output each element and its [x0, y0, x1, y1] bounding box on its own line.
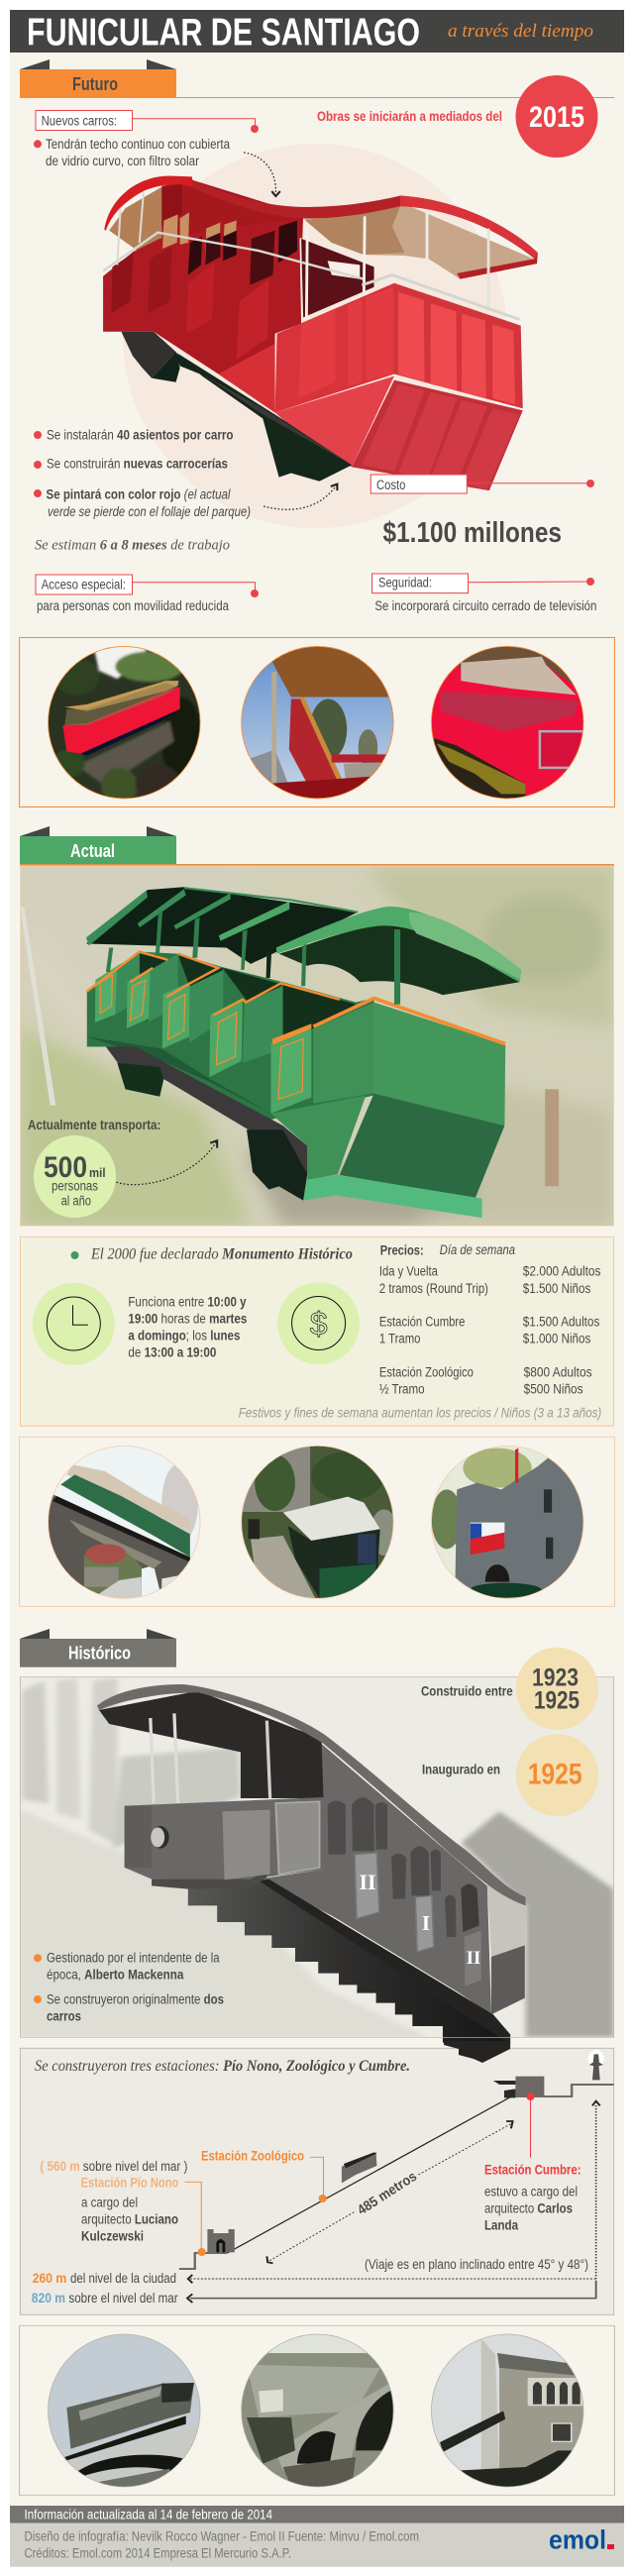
callout: construido entre: Construido entre [421, 1684, 513, 1699]
text: opening hours: a domingo; los lunes [128, 1329, 240, 1343]
section ribbon: Actual [20, 826, 614, 866]
callout: 500 mil personas: Actualmente transporta: [28, 1118, 160, 1132]
callout: 500 mil personas: personas [52, 1178, 98, 1193]
panel: historic carriage over faded photo [20, 1676, 614, 2064]
prices table: 2 tramos (Round Trip) [379, 1281, 488, 1296]
callout: seguridad: Se incorporará circuito cerrado de televisión [374, 598, 596, 613]
height: mar [32, 2291, 178, 2306]
callout: construido entre: 1925 [534, 1687, 580, 1715]
photo: old carriage on bridge [49, 2334, 200, 2487]
panel: schedule and prices [20, 1236, 614, 1426]
photo frame [242, 646, 393, 799]
bullet list: histórico [34, 1951, 224, 2024]
text: opening hours: de 13:00 a 19:00 [128, 1345, 216, 1360]
callout: construido entre: 1923 [532, 1664, 579, 1692]
photo: red carriage interior [432, 646, 583, 799]
bullet list: histórico: Se construyeron originalmente dos [47, 1992, 224, 2007]
station: Zoológico: Estación Zoológico [201, 2149, 304, 2164]
callout: nuevos carros: Tendrán techo continuo con cubierta [46, 137, 230, 152]
callout: seguridad: Seguridad: [378, 576, 432, 590]
panel: historic photos [20, 2325, 614, 2495]
callout: obras 2015: Obras se iniciarán a mediados del [317, 109, 502, 124]
station: Pío Nono [40, 2159, 187, 2244]
callout: nuevos carros: de vidrio curvo, con filtro solar [46, 154, 199, 168]
arrow: color pointer [264, 484, 337, 509]
icon: dollar: $ [310, 1306, 328, 1342]
callout: nuevos carros [34, 111, 259, 168]
callout: nuevos carros: Nuevos carros: [42, 113, 117, 129]
prices table: Estación Zoológico [379, 1365, 474, 1380]
prices table: $1.500 Adultos [523, 1315, 600, 1330]
carriage class labels: I [422, 1911, 430, 1935]
station: Pío Nono: Kulczewski [81, 2229, 144, 2244]
photo: red carriage in the forest [49, 644, 202, 805]
prices table: Estación Cumbre [379, 1315, 465, 1330]
callout: costo: Costo [376, 478, 405, 492]
note: inclination: (Viaje es en plano inclinado entre 45° y 48°) [365, 2257, 588, 2272]
footer: update bar: Información actualizada al 14 de febrero de 2014 [24, 2507, 272, 2522]
text: opening hours [128, 1294, 247, 1360]
callout: seguridad [372, 574, 596, 613]
photo: carriage at station [242, 1446, 398, 1598]
subtitle: a través del tiempo [448, 21, 593, 42]
callout: 500 mil personas [28, 1118, 160, 1218]
prices table: $1.500 Niños [523, 1281, 591, 1296]
station: Cumbre: Landa [484, 2218, 518, 2233]
photo: stone castle station [432, 1446, 583, 1598]
prices table: $2.000 Adultos [523, 1264, 601, 1279]
station: Pío Nono: Estación Pío Nono [81, 2176, 178, 2191]
bullet list: futuro [34, 428, 251, 519]
panel: actual carriage over faded photo [20, 866, 614, 1226]
callout: inaugurado en: Inaugurado en [422, 1763, 500, 1777]
footer: credits: Créditos: Emol.com 2014 Empresa El Mercurio S.A.P. [24, 2546, 291, 2561]
prices table: Día de semana [440, 1242, 515, 1257]
station: Pío Nono: a cargo del [81, 2196, 138, 2210]
prices table: $500 Niños [524, 1382, 583, 1397]
illustration: red future carriage [103, 176, 538, 490]
station: Cumbre: arquitecto Carlos [484, 2201, 573, 2216]
photo frame [49, 2334, 200, 2487]
callout: acceso especial: Acceso especial: [42, 578, 126, 592]
prices table: $800 Adultos [524, 1365, 592, 1380]
text: opening hours: Funciona entre 10:00 y [128, 1294, 247, 1309]
photo: old upper station [432, 2334, 583, 2487]
header bar [10, 10, 624, 54]
section ribbon: Futuro: Futuro [72, 74, 118, 94]
illustration: gray carriage [97, 1684, 526, 2064]
section ribbon: Histórico [20, 1629, 176, 1667]
height: ciudad: 260 m [33, 2271, 66, 2286]
section ribbon: Actual: Actual [70, 841, 115, 861]
station: Cumbre: estuvo a cargo del [484, 2185, 578, 2200]
arrow: transport pointer [117, 1140, 217, 1185]
photo frame [242, 1446, 393, 1598]
callout: obras 2015 [317, 75, 598, 158]
text: opening hours: 19:00 horas de martes [128, 1312, 247, 1327]
carriage class labels: II [467, 1948, 480, 1969]
title: FUNICULAR DE SANTIAGO [27, 12, 420, 54]
monument note: El 2000 fue declarado Monumento Histórico [90, 1246, 353, 1263]
pale background circle [123, 144, 507, 528]
callout: construido entre [421, 1648, 598, 1730]
bullet list: histórico: época, Alberto Mackenna [47, 1968, 184, 1983]
photo frame [432, 1446, 583, 1598]
photo frame [242, 2334, 393, 2487]
prices table [379, 1242, 601, 1397]
bullet list: futuro: Se pintará con color rojo (el actual [46, 487, 231, 502]
icon: dollar [277, 1282, 360, 1364]
station: Cumbre: Estación Cumbre: [484, 2163, 581, 2178]
callout: inaugurado en [422, 1734, 598, 1816]
station: Cumbre [484, 2163, 581, 2233]
heading: Se construyeron tres estaciones: Pío Nono, Zoológico y Cumbre. [35, 2058, 410, 2075]
background photo [20, 867, 614, 1226]
station: Pío Nono: ( 560 m sobre nivel del mar ) [40, 2159, 187, 2174]
bullet list: histórico: Gestionado por el intendente de la [47, 1951, 220, 1966]
prices table: $1.000 Niños [523, 1332, 591, 1346]
footer: update bar [10, 2506, 624, 2523]
callout: acceso especial: para personas con movilidad reducida [37, 598, 229, 613]
bullet list: futuro: verde se pierde con el follaje del parque) [48, 504, 251, 519]
bullet list: futuro: Se instalarán 40 asientos por carro [47, 428, 234, 443]
section ribbon: Histórico: Histórico [68, 1644, 131, 1664]
prices table: Ida y Vuelta [379, 1264, 438, 1279]
prices table: ½ Tramo [379, 1382, 425, 1397]
bullet list: futuro: Se construirán nuevas carrocerías [47, 457, 228, 472]
photo: green carriage on bridge [49, 1446, 200, 1598]
carriage base overlap [444, 2041, 510, 2063]
logo: emol: emol [549, 2525, 606, 2555]
footer: credits [10, 2523, 624, 2567]
photo frame [432, 646, 583, 799]
prices table: Precios: [380, 1243, 424, 1258]
prices table: 1 Tramo [379, 1332, 420, 1346]
panel: actual photos [20, 1437, 614, 1606]
photo frame [49, 646, 200, 799]
callout: acceso especial [36, 575, 259, 613]
height: ciudad [33, 2271, 176, 2286]
distance label: 485 metros [355, 2168, 419, 2217]
height: mar: 820 m [32, 2291, 65, 2306]
illustration: green carriage [86, 887, 522, 1218]
height: ciudad: del nivel de la ciudad [70, 2271, 176, 2286]
photo: view from the carriage [242, 644, 398, 803]
carriage class labels [359, 1870, 480, 1969]
photo: old bridge and city [242, 2334, 393, 2487]
station: Pío Nono: arquitecto Luciano [81, 2212, 178, 2227]
callout: 500 mil personas: 500 [44, 1151, 87, 1184]
callout: inaugurado en: 1925 [528, 1759, 582, 1791]
callout: obras 2015: 2015 [529, 101, 584, 134]
section ribbon: Futuro [20, 59, 614, 98]
callout: 500 mil personas: al año [61, 1193, 91, 1209]
background photo [20, 1677, 614, 2037]
panel: future photos [20, 637, 614, 806]
footer: credits: Diseño de infografía: Nevilk Rocco Wagner - Emol II Fuente: Minvu / Emol.com [24, 2528, 419, 2543]
icon: clock [33, 1283, 115, 1365]
carriage class labels: II [359, 1870, 376, 1894]
slope diagram [179, 2050, 614, 2303]
arrow: roof pointer [244, 153, 280, 196]
photo frame [49, 1446, 200, 1598]
panel: stations diagram [20, 2041, 614, 2314]
height: mar: sobre el nivel del mar [68, 2291, 178, 2306]
callout: 500 mil personas: mil [89, 1165, 105, 1180]
callout: costo [370, 475, 594, 549]
bullet list: histórico: carros [47, 2009, 81, 2024]
text: meses de trabajo: Se estiman 6 a 8 meses de trabajo [35, 538, 230, 554]
photo frame [432, 2334, 583, 2487]
callout: costo: $1.100 millones [382, 517, 562, 549]
